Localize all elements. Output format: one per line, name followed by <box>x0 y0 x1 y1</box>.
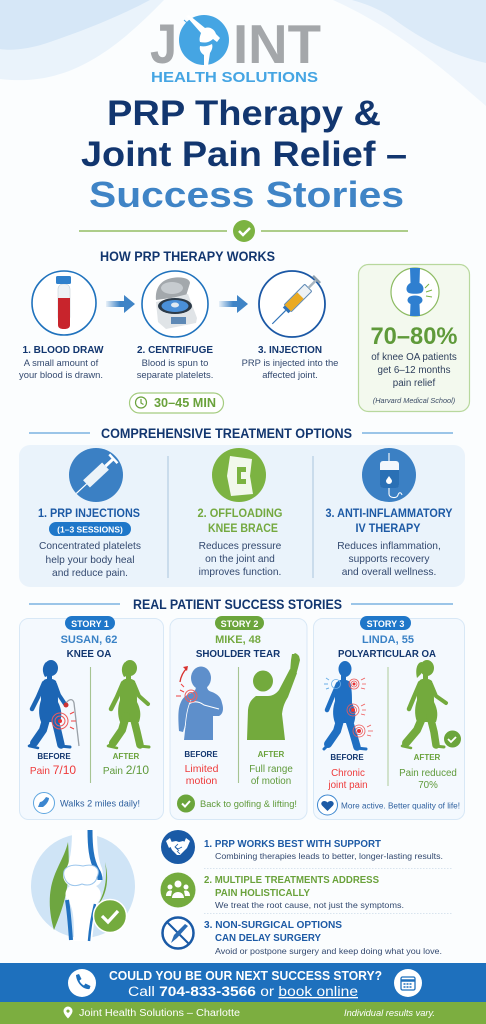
panel: story 1 Susan: BEFORE <box>37 752 71 761</box>
treatment 1: PRP injections: and reduce pain. <box>52 568 128 579</box>
icon: knee joint <box>391 268 439 316</box>
logo emblem: knee in circle <box>179 15 229 66</box>
figure: before, walking with cane <box>29 660 79 748</box>
call to action bar: COULD YOU BE OUR NEXT SUCCESS STORY? <box>109 969 382 983</box>
panel: 70-80% stat: (Harvard Medical School) <box>373 396 455 405</box>
sessions pill: (1–3 SESSIONS) <box>57 524 123 534</box>
panel: story 2 Mike: AFTER <box>258 750 285 759</box>
panel: treatment options <box>19 445 465 587</box>
panel: story 2 Mike: motion <box>186 775 217 787</box>
panel: story 3 Linda: BEFORE <box>330 753 364 762</box>
illustration: healthy knee <box>31 830 135 941</box>
takeaway 3: 3. NON-SURGICAL OPTIONS <box>204 920 342 931</box>
story badge: STORY 1 <box>71 619 109 629</box>
step 1: blood draw: 1. BLOOD DRAW <box>22 344 104 356</box>
panel: story 2 Mike: BEFORE <box>184 750 218 759</box>
icon: blood tube <box>32 271 96 335</box>
panel: story 3 Linda: 70% <box>418 780 438 791</box>
outcome: Back to golfing & lifting! <box>200 799 297 809</box>
story badge: STORY 2 <box>221 619 258 629</box>
title: Success Stories <box>89 174 404 215</box>
figure: before, shoulder pain <box>176 666 223 740</box>
figure: after, walking <box>108 660 149 748</box>
title: PRP Therapy & <box>107 94 381 133</box>
panel: story 2 Mike: SHOULDER TEAR <box>196 649 280 660</box>
step 3: injection: PRP is injected into the <box>242 357 338 368</box>
story badge: STORY 3 <box>367 619 404 629</box>
logo: HEALTH SOLUTIONS <box>151 69 318 86</box>
logo: J <box>150 12 177 75</box>
panel: 70-80% stat: get 6–12 months <box>378 365 451 376</box>
check badge <box>94 900 126 932</box>
outcome: Walks 2 miles daily! <box>60 798 140 808</box>
call to action bar <box>0 963 486 1003</box>
step 3: injection: 3. INJECTION <box>258 344 322 356</box>
story badge <box>360 616 411 630</box>
takeaway 1: Combining therapies leads to better, longer-lasting results. <box>215 851 443 861</box>
treatment 3: anti-inflammatory IV therapy: 3. ANTI-INFLAMMATORY <box>326 508 453 520</box>
treatment 2: offloading knee brace <box>198 448 283 578</box>
figure: before, multiple pain points <box>324 661 373 749</box>
panel: story 2 Mike: Limited <box>185 763 219 775</box>
story badge <box>215 616 264 630</box>
takeaway 1: 1. PRP WORKS BEST WITH SUPPORT <box>204 839 381 850</box>
icon: syringe <box>259 271 325 337</box>
takeaway 2: 2. MULTIPLE TREATMENTS ADDRESS <box>204 875 379 886</box>
takeaway 3 <box>162 918 442 956</box>
figure: after, walking <box>402 660 446 748</box>
panel: 70-80% stat: 70–80% <box>370 323 458 350</box>
treatment 1: PRP injections: 1. PRP INJECTIONS <box>38 508 140 520</box>
step 3: injection <box>242 271 338 380</box>
takeaway 1 <box>161 830 443 864</box>
treatment 3: anti-inflammatory IV therapy: IV THERAPY <box>356 523 421 535</box>
panel: story 3 Linda: AFTER <box>414 753 441 762</box>
takeaway 2: We treat the root cause, not just the symptoms. <box>215 900 404 910</box>
panel: story 2 Mike: Full range <box>249 764 293 775</box>
footer bar: Individual results vary. <box>344 1008 435 1018</box>
title divider with check <box>79 220 408 242</box>
title: Joint Pain Relief – <box>81 135 407 174</box>
panel: story 1 Susan <box>20 616 164 820</box>
header background waves <box>0 0 486 106</box>
takeaway 3: Avoid or postpone surgery and keep doing what you love. <box>215 946 442 956</box>
outcome <box>34 792 140 814</box>
icon: check badge <box>444 730 461 748</box>
footer bar <box>0 1002 486 1024</box>
treatment 3: anti-inflammatory IV therapy: and overall wellness. <box>342 567 436 578</box>
treatment 1: PRP injections: Concentrated platelets <box>39 541 141 552</box>
panel: story 2 Mike <box>170 616 307 820</box>
takeaway 2 <box>160 872 404 910</box>
panel: story 2 Mike: MIKE, 48 <box>215 634 261 646</box>
outcome <box>177 794 297 812</box>
treatment 2: offloading knee brace: Reduces pressure <box>199 541 282 552</box>
footer bar: Joint Health Solutions – Charlotte <box>79 1008 240 1019</box>
time badge: 30–45 MIN <box>154 396 216 410</box>
panel: story 1 Susan: SUSAN, 62 <box>61 634 117 646</box>
panel: 70-80% stat: of knee OA patients <box>371 352 457 363</box>
heading: comprehensive treatment options: COMPREHENSIVE TREATMENT OPTIONS <box>101 426 352 441</box>
panel: 70-80% stat: pain relief <box>393 378 436 389</box>
panel: story 1 Susan: Pain 7/10 <box>30 763 76 777</box>
icon: location pin <box>64 1006 72 1018</box>
panel: story 3 Linda: Pain reduced <box>399 768 457 779</box>
arrow: step 2 to 3 <box>219 295 248 313</box>
outcome <box>318 795 460 815</box>
step 3: injection: affected joint. <box>262 369 318 380</box>
panel: story 3 Linda: joint pain <box>327 780 368 791</box>
logo <box>150 12 321 86</box>
step 1: blood draw: A small amount of <box>24 357 99 368</box>
call to action bar: Call 704-833-3566 or book online <box>128 984 358 999</box>
time badge <box>130 393 224 413</box>
takeaway 2: PAIN HOLISTICALLY <box>215 888 310 899</box>
figure: after, arm raised <box>247 653 300 740</box>
icon: calendar <box>394 969 422 997</box>
panel: story 3 Linda: POLYARTICULAR OA <box>338 649 436 660</box>
step 1: blood draw <box>19 271 104 380</box>
step 2: centrifuge: Blood is spun to <box>142 357 208 368</box>
panel: story 3 Linda: LINDA, 55 <box>362 634 414 646</box>
treatment 3: anti-inflammatory IV therapy: supports recovery <box>349 554 430 565</box>
icon: syringe badge <box>69 448 123 502</box>
treatment 2: offloading knee brace: improves function. <box>199 567 281 578</box>
arrow: step 1 to 2 <box>106 295 135 313</box>
heading: how PRP therapy works: HOW PRP THERAPY WORKS <box>100 249 275 264</box>
outcome: More active. Better quality of life! <box>341 800 460 810</box>
takeaway 3: CAN DELAY SURGERY <box>215 933 321 944</box>
icon: handshake <box>161 830 195 864</box>
treatment 1: PRP injections: help your body heal <box>46 555 134 566</box>
panel: 70-80% stat <box>358 264 470 412</box>
treatment 2: offloading knee brace: on the joint and <box>205 554 275 565</box>
panel: story 3 Linda: Chronic <box>331 768 365 779</box>
step 1: blood draw: your blood is drawn. <box>19 369 103 380</box>
panel: story 1 Susan: AFTER <box>113 752 140 761</box>
panel: story 3 Linda <box>314 616 464 820</box>
icon: phone <box>68 969 96 997</box>
treatment 1: PRP injections <box>38 448 141 579</box>
icon: clock <box>136 397 146 408</box>
step 2: centrifuge <box>137 271 213 380</box>
icon: IV bag <box>362 448 416 502</box>
heading: real patient success stories: REAL PATIENT SUCCESS STORIES <box>133 597 342 612</box>
treatment 2: offloading knee brace: KNEE BRACE <box>208 523 278 535</box>
treatment 3: anti-inflammatory IV therapy <box>326 448 453 578</box>
treatment 3: anti-inflammatory IV therapy: Reduces inflammation, <box>337 541 441 552</box>
logo: INT <box>233 13 321 75</box>
panel: story 1 Susan: KNEE OA <box>67 649 111 660</box>
icon: knee brace <box>212 448 266 502</box>
title <box>81 94 407 215</box>
step 2: centrifuge: separate platelets. <box>137 369 213 380</box>
icon: centrifuge <box>142 271 208 337</box>
step 2: centrifuge: 2. CENTRIFUGE <box>137 344 213 356</box>
treatment 2: offloading knee brace: 2. OFFLOADING <box>198 508 283 520</box>
panel: story 1 Susan: Pain 2/10 <box>103 763 149 777</box>
panel: story 2 Mike: of motion <box>251 776 291 787</box>
story badge <box>65 616 115 630</box>
icon: people <box>160 872 196 908</box>
icon: no surgery <box>162 918 194 948</box>
